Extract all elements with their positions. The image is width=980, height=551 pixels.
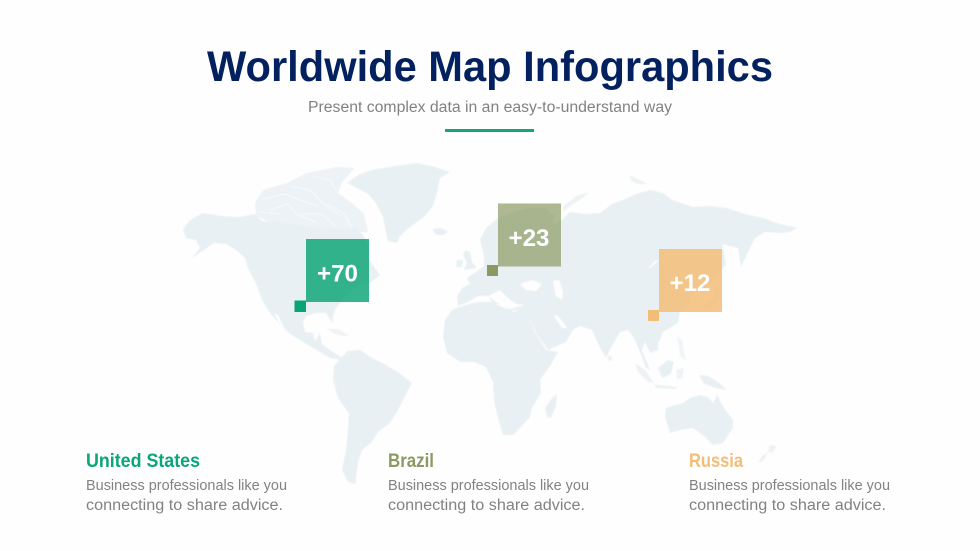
New Guinea [699, 375, 727, 390]
+70 value: +70 [317, 260, 358, 288]
Madagascar [545, 394, 557, 418]
heading: Brazil [388, 451, 434, 472]
caption: United States [86, 451, 287, 514]
Philippines [677, 337, 686, 360]
Iceland [432, 228, 448, 235]
Greenland [347, 163, 450, 243]
heading: Russia [689, 451, 743, 472]
+23 value: +23 [508, 225, 550, 252]
body text: connecting to share advice. [689, 497, 886, 514]
Eurasia [457, 190, 797, 370]
United Kingdom and Ireland [456, 250, 477, 270]
body text: Business professionals like you [689, 477, 890, 494]
body text: connecting to share advice. [86, 497, 283, 514]
Sulawesi [676, 368, 684, 380]
world map [183, 163, 797, 484]
subtitle: Present complex data in an easy-to-understand way [308, 99, 672, 116]
Sumatra [635, 363, 654, 383]
North America [183, 213, 380, 364]
South America [333, 350, 412, 484]
Cuba and Caribbean [327, 329, 350, 336]
body text: Business professionals like you [86, 477, 287, 494]
body text: Business professionals like you [388, 477, 589, 494]
pin square [487, 265, 498, 276]
+23 square [498, 204, 561, 266]
Australia [665, 395, 733, 445]
+70 square [306, 239, 369, 302]
+12 square [659, 249, 722, 312]
Africa [443, 302, 558, 435]
Canadian Arctic islands [255, 167, 368, 232]
body text: connecting to share advice. [388, 497, 585, 514]
caption: Russia [689, 451, 890, 514]
Novaya Zemlya [562, 192, 590, 213]
pin square [294, 300, 306, 312]
Svalbard and Arctic islands [630, 175, 648, 184]
New Zealand [758, 445, 777, 463]
marker: China region [648, 249, 722, 321]
title: Worldwide Map Infographics [207, 44, 773, 91]
Arabian Peninsula [530, 312, 573, 348]
+12 value: +12 [670, 270, 710, 297]
caption: Brazil [388, 451, 589, 514]
heading: United States [86, 451, 200, 472]
marker: United States [294, 239, 369, 312]
title accent underline [445, 129, 534, 132]
Java [654, 384, 677, 389]
Sri Lanka [608, 355, 612, 361]
pin square [648, 310, 659, 321]
Japan [704, 286, 722, 310]
marker: Russia [487, 204, 561, 276]
Borneo [658, 360, 674, 378]
